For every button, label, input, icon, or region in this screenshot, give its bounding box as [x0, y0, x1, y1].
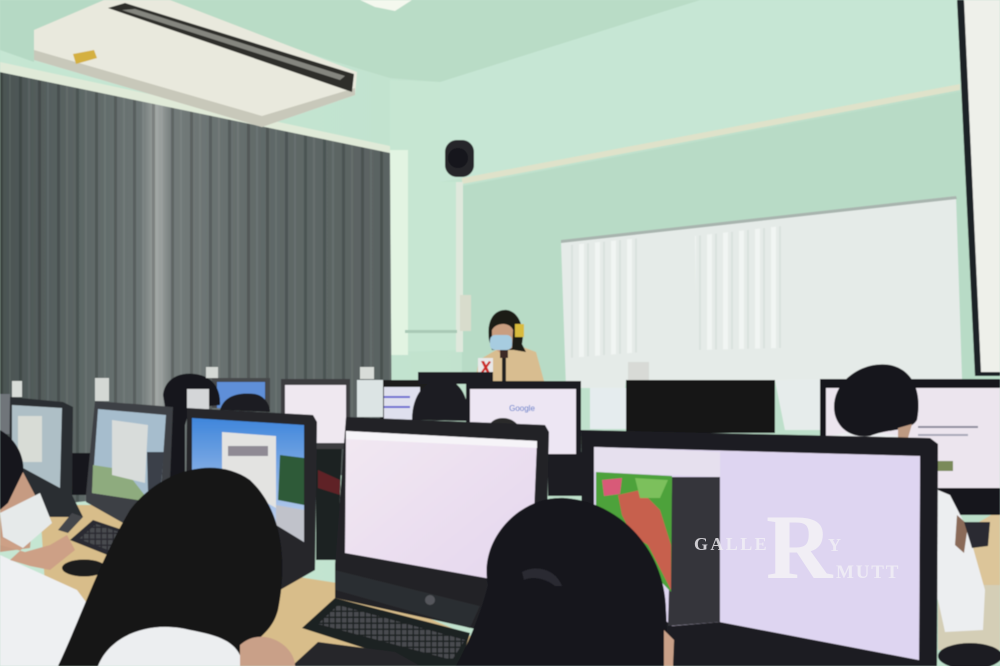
student front left — [58, 468, 295, 666]
desk surface — [40, 505, 1000, 666]
watermark: GALLE: GALLE — [694, 534, 769, 554]
keyboard center — [302, 598, 470, 666]
monitor: google — [466, 381, 581, 456]
conduit and socket — [405, 182, 471, 352]
monitor: front right — [581, 430, 938, 666]
tablet — [292, 642, 420, 666]
whiteboard paper sheets — [590, 362, 649, 429]
student front center (bun) — [456, 498, 674, 666]
monitor: center front — [335, 417, 549, 630]
mouse — [62, 560, 106, 576]
back row monitors — [212, 372, 1000, 515]
monitor: right — [820, 379, 1000, 515]
keyboard right — [964, 522, 990, 548]
monitor: back center small — [380, 380, 430, 420]
speaker — [445, 140, 474, 177]
watermark — [694, 496, 900, 598]
air conditioner — [34, 0, 357, 127]
student left with mask — [0, 430, 92, 666]
monitor: black — [626, 380, 775, 433]
watermark: MUTT: MUTT — [836, 562, 900, 583]
red sleeve of student — [318, 470, 340, 495]
student right — [828, 364, 985, 632]
monitor: desktop wallpaper — [186, 408, 317, 590]
ceiling light — [360, 0, 412, 11]
watermark: Y: Y — [828, 535, 841, 555]
vertical blinds curtain — [0, 62, 392, 510]
dark desk objects between rows — [70, 445, 582, 560]
phone — [58, 513, 83, 533]
monitor: far back left — [212, 378, 270, 408]
monitor: left small — [9, 397, 83, 517]
monitor: far left edge — [0, 394, 10, 434]
back-row student heads — [163, 374, 517, 480]
whiteboard — [561, 196, 962, 430]
presenter — [475, 310, 544, 381]
projection screen — [957, 0, 1000, 376]
keyboard left — [70, 520, 132, 560]
monitor: left second — [86, 401, 173, 528]
watermark: R: R — [766, 496, 834, 598]
monitor: back — [281, 379, 350, 449]
wall rail — [462, 84, 960, 184]
monitor: google: Google — [509, 404, 535, 413]
black object bottom right — [938, 643, 1000, 666]
